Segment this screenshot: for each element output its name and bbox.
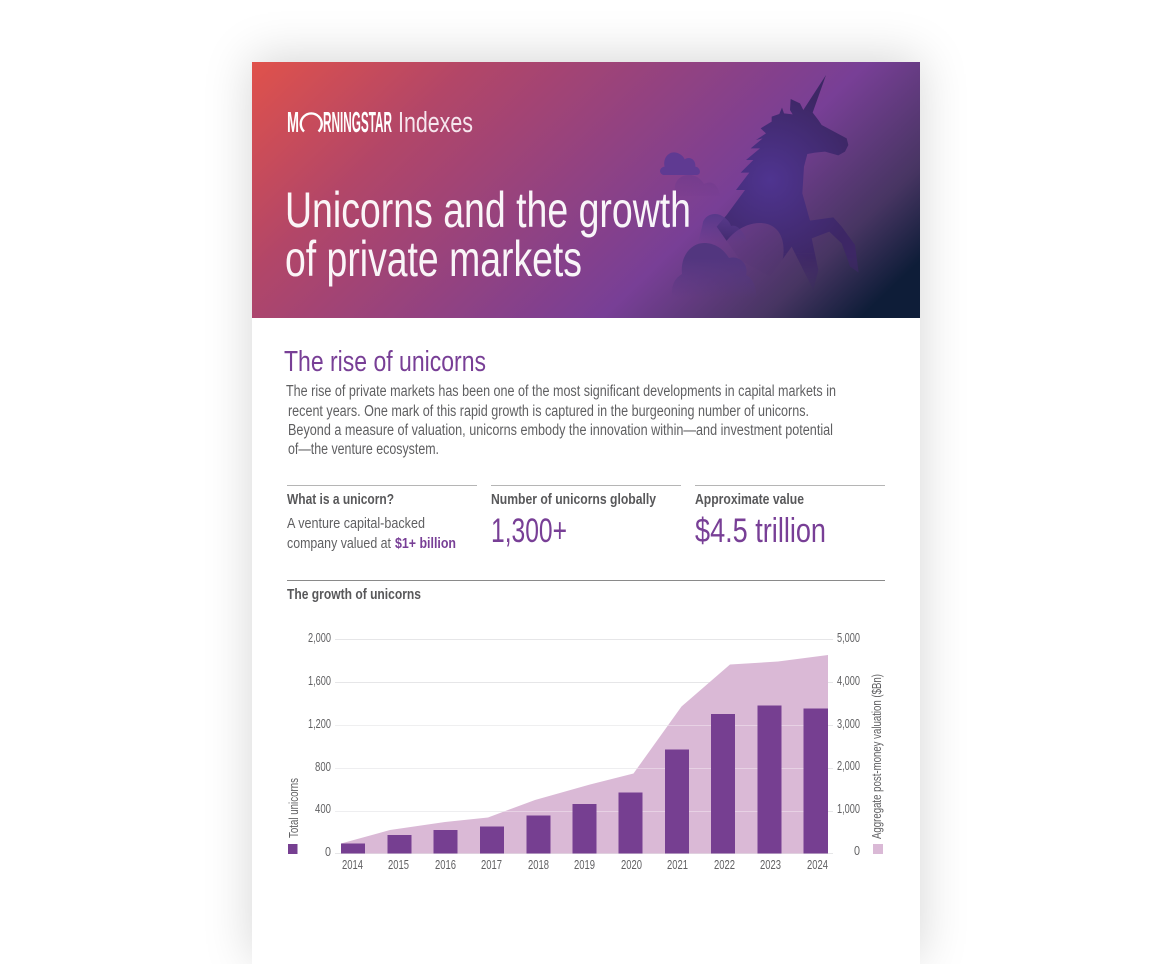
year labels: 2018 (528, 858, 549, 872)
year labels: 2017 (481, 858, 502, 872)
panel: approximate value (695, 485, 885, 550)
panel: report page (252, 62, 920, 964)
chart: growth of unicorns (287, 631, 884, 872)
legend: aggregate valuation: Aggregate post-money valuation ($Bn) (870, 674, 884, 839)
icon: faint cloud behind (675, 175, 720, 196)
logo arc (301, 113, 322, 132)
infographic artwork (252, 62, 920, 869)
right axis labels: 0 (854, 844, 860, 858)
year labels: 2021 (667, 858, 688, 872)
panel: what is a unicorn: company valued at (287, 535, 392, 552)
logo: M (287, 107, 299, 139)
year labels: 2019 (574, 858, 595, 872)
icon: large lower cloud (672, 243, 756, 306)
year labels: 2014 (342, 858, 363, 872)
panel: what is a unicorn: What is a unicorn? (287, 492, 394, 508)
text block: introduction: The rise of private markets has been one of the most significant developments in capital markets in (286, 383, 836, 400)
chart heading: The growth of unicorns (287, 587, 421, 603)
icon: small cloud (660, 152, 700, 175)
title: of private markets (285, 231, 582, 287)
panel: what is a unicorn: A venture capital-backed (287, 515, 425, 532)
panel: approximate value: Approximate value (695, 492, 804, 508)
year labels (342, 858, 828, 872)
icon: cloud beside unicorn (698, 214, 748, 244)
bars: total unicorns (341, 706, 828, 854)
year labels: 2016 (435, 858, 456, 872)
legend: total unicorns (287, 778, 301, 854)
title: Unicorns and the growth (285, 182, 691, 238)
left axis labels: 400 (315, 802, 331, 816)
left axis labels (308, 631, 331, 859)
text block: introduction: Beyond a measure of valuation, unicorns embody the innovation within—and investment potential (288, 422, 833, 439)
panel: what is a unicorn (287, 485, 477, 552)
area: aggregate valuation (341, 655, 828, 854)
year labels: 2020 (621, 858, 642, 872)
panel: number of unicorns (491, 485, 681, 550)
right axis labels: 1,000 (837, 802, 860, 816)
right axis labels: 2,000 (837, 759, 860, 773)
year labels: 2022 (714, 858, 735, 872)
icon: middle cloud veiling the unicorn (716, 223, 784, 318)
panel: number of unicorns: 1,300+ (491, 512, 567, 550)
right axis labels: 5,000 (837, 631, 860, 645)
year labels: 2015 (388, 858, 409, 872)
left axis labels: 2,000 (308, 631, 331, 645)
year labels: 2024 (807, 858, 828, 872)
left axis labels: 1,600 (308, 674, 331, 688)
left axis labels: 0 (325, 845, 331, 859)
right axis labels (837, 631, 860, 858)
text block: introduction: recent years. One mark of this rapid growth is captured in the burgeoning number of unicorns. (288, 403, 809, 420)
panel: approximate value: $4.5 trillion (695, 512, 826, 550)
heading: the rise of unicorns: The rise of unicorns (284, 346, 486, 378)
legend: total unicorns: Total unicorns (287, 778, 301, 838)
text block: introduction (286, 383, 836, 458)
header banner (252, 62, 920, 318)
left axis labels: 800 (315, 760, 331, 774)
right axis labels: 3,000 (837, 717, 860, 731)
logo: Indexes (398, 107, 473, 139)
text block: introduction: of—the venture ecosystem. (288, 441, 439, 458)
left axis labels: 1,200 (308, 717, 331, 731)
right axis labels: 4,000 (837, 674, 860, 688)
title (285, 182, 691, 287)
logo: RNINGSTAR (323, 107, 392, 139)
panel: what is a unicorn: $1+ billion (395, 535, 456, 552)
icon: unicorn (717, 75, 859, 290)
panel: number of unicorns: Number of unicorns globally (491, 492, 656, 508)
year labels: 2023 (760, 858, 781, 872)
